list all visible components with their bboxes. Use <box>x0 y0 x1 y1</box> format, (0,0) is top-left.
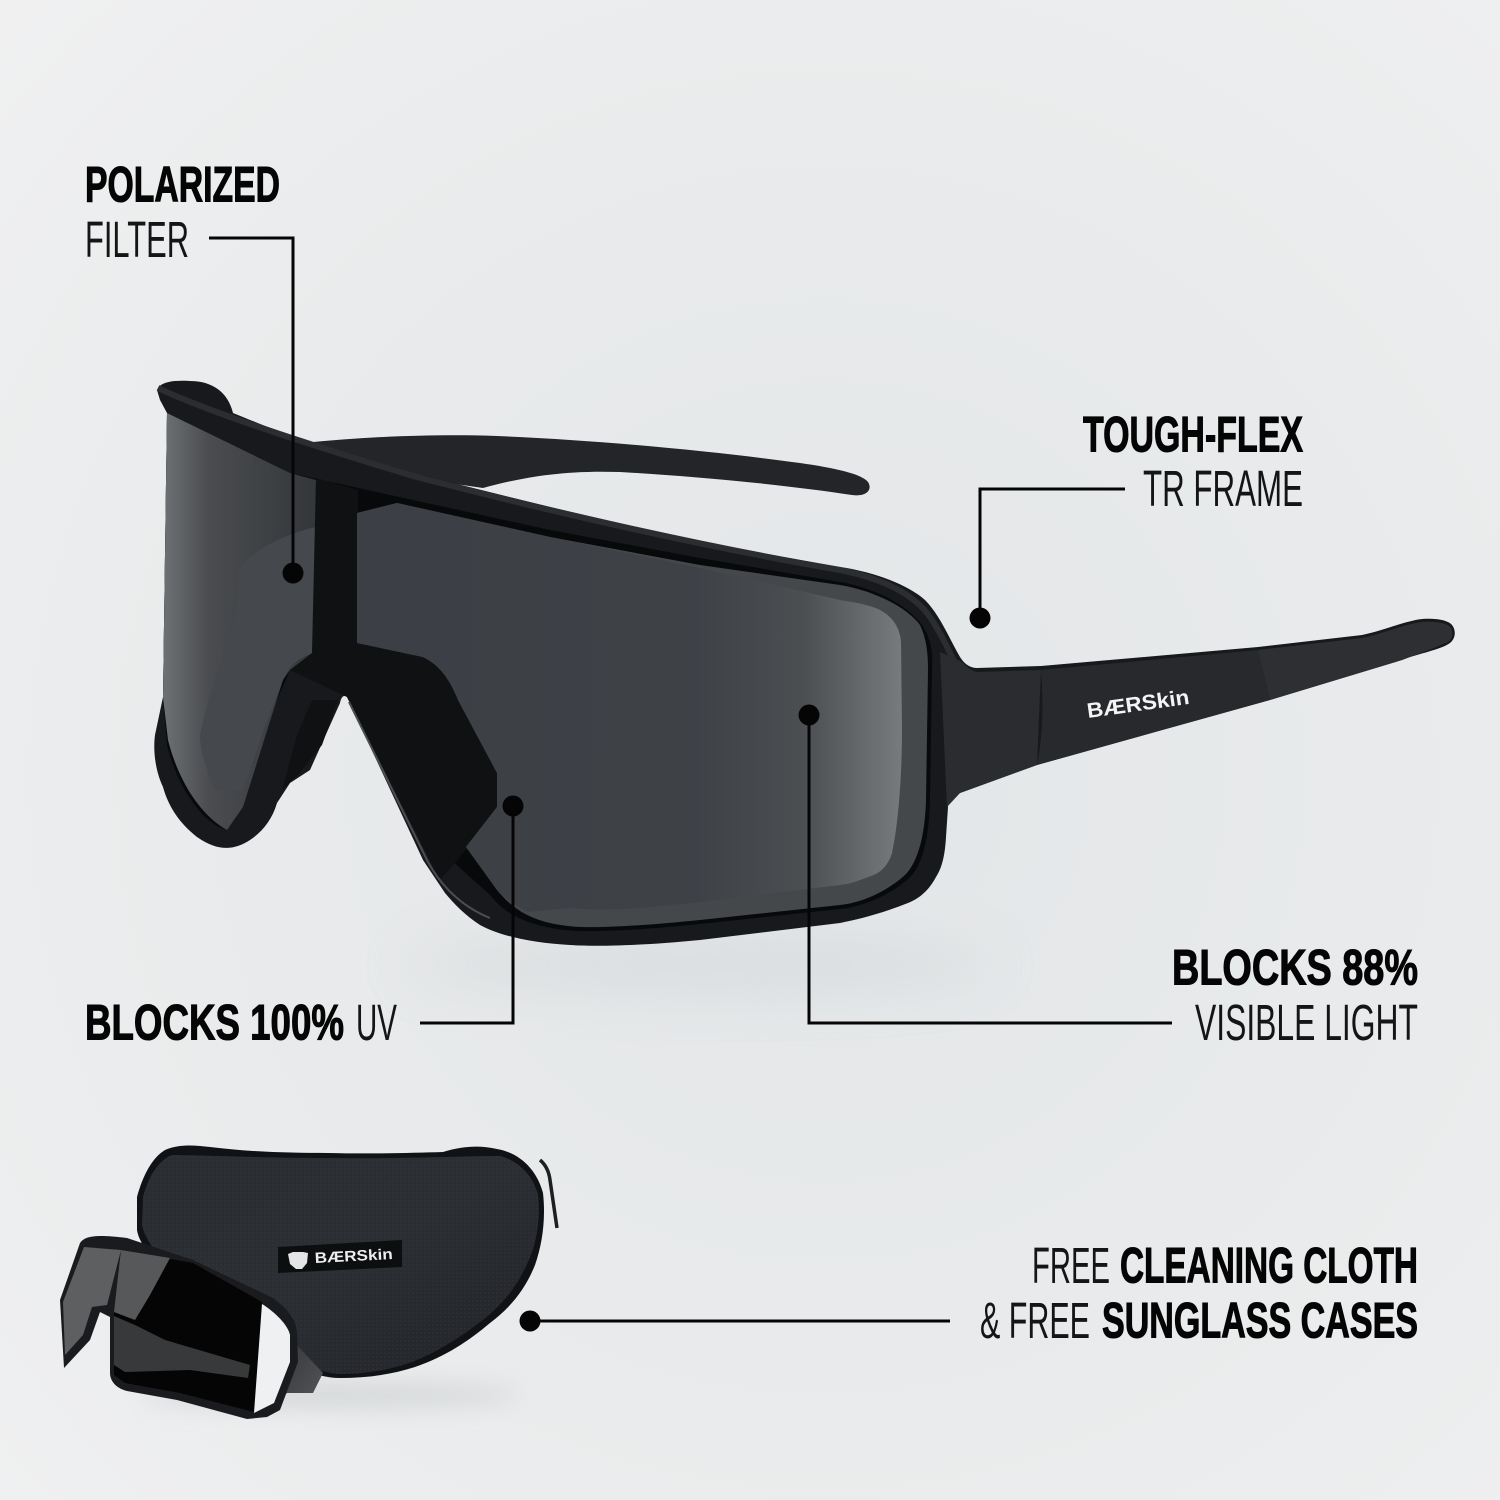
callout: blocks 100% UV: UV <box>356 994 397 1051</box>
small glasses left lens <box>63 1247 121 1355</box>
marker dot <box>520 1310 540 1332</box>
small glasses main lens <box>114 1250 262 1412</box>
case label: BÆRSkin <box>314 1246 393 1267</box>
ground shadow <box>140 1383 520 1407</box>
callout: polarized filter <box>85 156 304 584</box>
marker dot <box>282 562 304 584</box>
leader line <box>809 715 1172 1023</box>
soft shadow under glasses <box>400 941 1000 989</box>
subheading: FILTER <box>85 211 189 268</box>
logo on temple: BÆRSkin <box>1085 686 1191 723</box>
right lens <box>357 503 928 927</box>
frame: outer silhouette with temple <box>154 381 1455 946</box>
heading: BLOCKS 88% <box>1172 940 1418 996</box>
glossy nose edge <box>349 702 490 918</box>
marker dot <box>798 704 820 726</box>
case label <box>278 1240 402 1273</box>
temple arm panel <box>1037 650 1270 765</box>
label: BLOCKS 100% <box>85 994 344 1050</box>
hard case <box>137 1145 544 1378</box>
leader line <box>530 1320 950 1322</box>
rear temple arm <box>303 435 870 495</box>
side panel: frame hinge shading <box>940 652 1041 807</box>
frame: top bevel <box>158 388 958 668</box>
small glasses white reflection <box>254 1304 290 1413</box>
leader line <box>980 489 1125 618</box>
small sunglasses <box>60 1236 323 1419</box>
small glasses grey lens reflection <box>114 1250 170 1320</box>
frame: dark inner rim <box>163 413 932 931</box>
callout: blocks 88% visible light <box>798 704 1418 1051</box>
lens inner tinted panel <box>357 503 902 912</box>
callout: blocks 100% UV <box>85 796 524 1051</box>
subheading: TR FRAME <box>1143 460 1303 517</box>
heading: TOUGH-FLEX <box>1083 406 1303 462</box>
heading: POLARIZED <box>85 156 280 212</box>
callout: free cloth and cases <box>520 1237 1418 1349</box>
callout: tough-flex frame <box>970 406 1303 628</box>
small glasses temple stub <box>270 1340 323 1410</box>
small glasses frame <box>60 1236 298 1419</box>
icon: bear head <box>288 1252 308 1269</box>
left lens <box>163 413 316 830</box>
main sunglasses photo <box>154 381 1455 946</box>
marker dot <box>970 608 990 628</box>
case mesh surface <box>142 1155 539 1374</box>
leader line <box>420 806 513 1023</box>
leader line <box>209 238 293 573</box>
marker dot <box>502 796 524 816</box>
nose pad <box>282 700 338 790</box>
temple arm tip <box>1258 622 1452 700</box>
center bridge bar <box>290 478 498 880</box>
case and small glasses photo <box>60 1145 557 1419</box>
zipper pull <box>540 1160 557 1228</box>
line one: FREE <box>1032 1237 1110 1294</box>
line two: & FREE <box>980 1292 1090 1349</box>
